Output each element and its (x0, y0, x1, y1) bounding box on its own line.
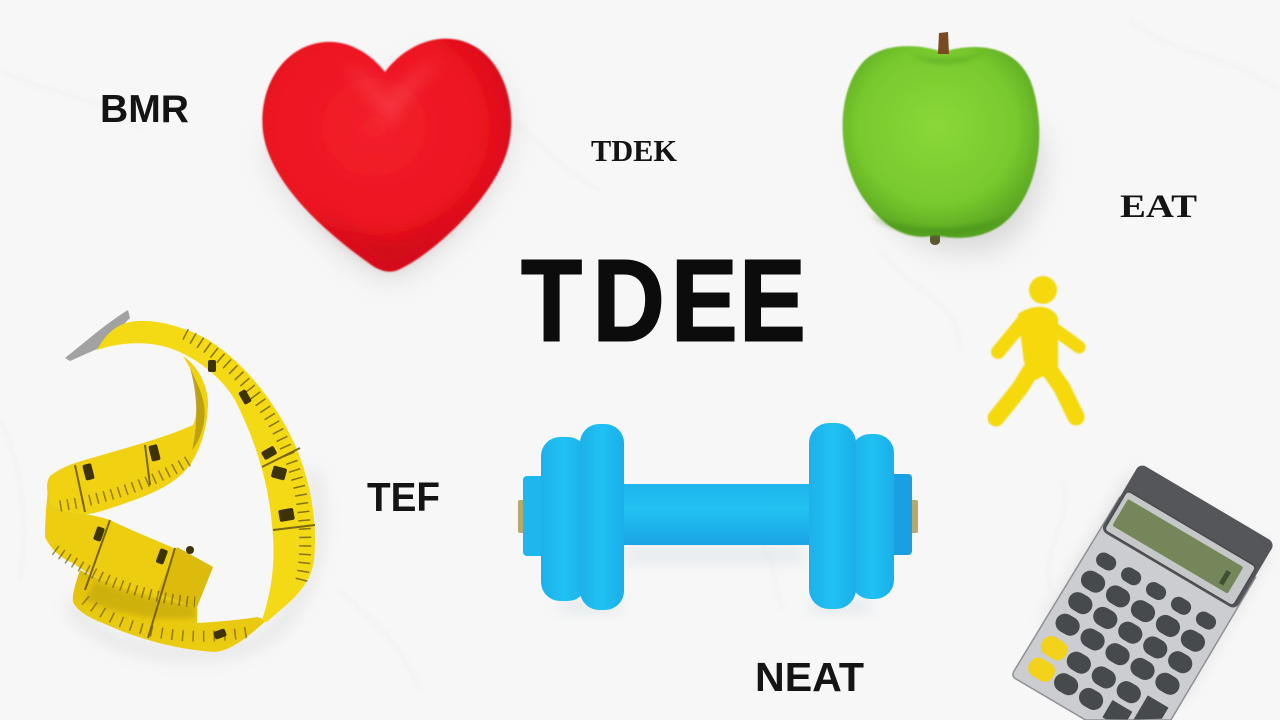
right plate small (851, 434, 894, 599)
label: TEF: TEF (367, 474, 440, 520)
keypad bottom row (1064, 683, 1103, 706)
label: BMR: BMR (100, 88, 189, 131)
title: TDEE: TDEE (521, 235, 806, 365)
strip: outer band (97, 321, 315, 622)
bar (615, 484, 815, 545)
icon: blue dumbbell (518, 423, 918, 610)
display digit (1219, 570, 1231, 585)
top dark band (1100, 463, 1275, 610)
icon: calculator (1013, 463, 1275, 720)
display (1112, 499, 1243, 594)
strip: bottom roll (73, 570, 267, 652)
label: TDEK: TDEK (591, 133, 677, 168)
enter key (1134, 695, 1168, 720)
scale numbers (82, 360, 295, 640)
keypad (1051, 559, 1217, 714)
calculator body (1013, 497, 1256, 720)
left plate large (580, 424, 624, 610)
label: EAT: EAT (1120, 189, 1197, 225)
left tip (518, 500, 526, 533)
right tip (910, 500, 918, 533)
icon: red heart (262, 39, 511, 282)
strip: left fold (45, 476, 213, 607)
right plate large (809, 423, 856, 609)
yellow keys (1025, 633, 1071, 685)
left cap (523, 476, 545, 556)
left plate small (541, 437, 587, 601)
cut-off key (1102, 700, 1132, 720)
scale ticks (55, 334, 315, 638)
display frame (1104, 490, 1256, 606)
label: NEAT: NEAT (755, 654, 864, 700)
strip: inner descending band (47, 356, 208, 514)
icon: green apple (843, 32, 1043, 252)
metal tip (65, 310, 130, 361)
right cap (890, 474, 912, 555)
icon: measuring tape (45, 310, 318, 654)
icon: walking person (996, 276, 1079, 418)
